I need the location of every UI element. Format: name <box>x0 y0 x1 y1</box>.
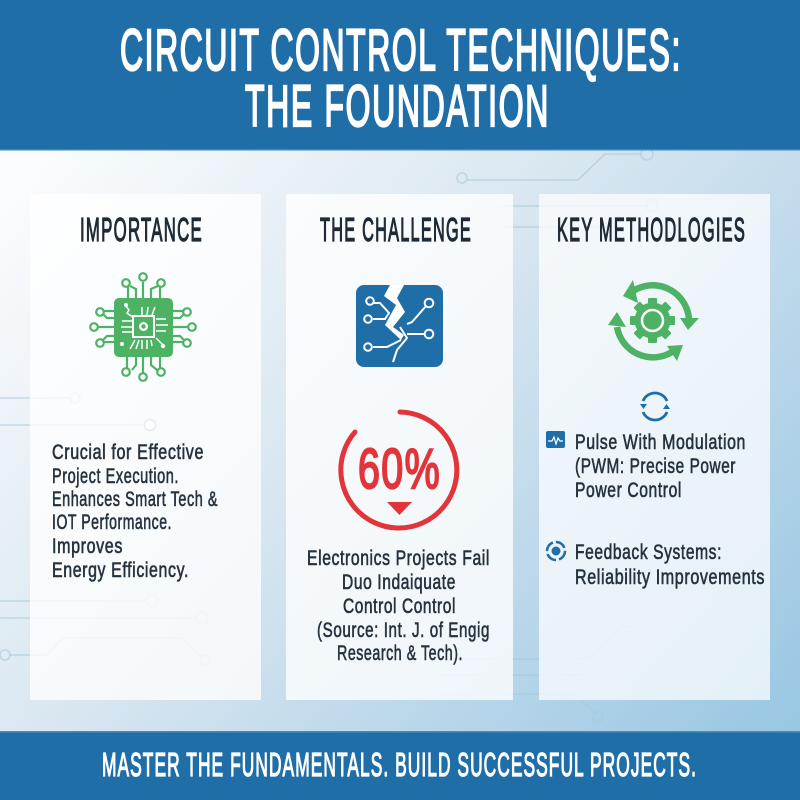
connector node on panel <box>144 420 156 430</box>
text: pwm: Power Control <box>575 479 682 502</box>
panel: the challenge: THE CHALLENGE <box>320 211 472 248</box>
text: importance points: Project Execution. <box>52 465 179 488</box>
text: challenge description: Duo Indaiquate <box>342 571 456 594</box>
text: importance points: Energy Efficiency. <box>52 559 189 582</box>
text: challenge description: Electronics Projects Fail <box>307 547 490 570</box>
header band <box>0 0 800 150</box>
text: pwm <box>575 431 746 502</box>
icon: feedback eye <box>547 542 565 560</box>
icon: green gear with cycle arrows <box>608 280 699 361</box>
chart: 60% ring gauge: 60% <box>358 437 441 501</box>
item: pulse width modulation <box>546 431 746 502</box>
icon: broken circuit <box>356 285 443 367</box>
heading: importance: IMPORTANCE <box>80 211 203 248</box>
item: feedback systems <box>547 541 765 589</box>
panel: importance <box>30 194 261 700</box>
text: pwm: (PWM: Precise Power <box>575 455 736 478</box>
text: importance points: Enhances Smart Tech & <box>52 488 218 511</box>
text: importance points <box>52 441 218 582</box>
title: THE FOUNDATION <box>245 74 550 139</box>
text: feedback <box>575 541 765 589</box>
text: feedback: Feedback Systems: <box>575 541 722 564</box>
footer band <box>0 731 800 800</box>
icon: pulse wave <box>546 431 565 448</box>
text: challenge description: (Source: Int. J. of Engig <box>317 619 490 642</box>
text: challenge description <box>307 547 490 665</box>
text: importance points: IOT Performance. <box>52 511 172 534</box>
title <box>120 18 682 139</box>
text: challenge description: Control Control <box>343 595 456 618</box>
text: importance points: Crucial for Effective <box>52 441 204 464</box>
text: pwm: Pulse With Modulation <box>575 431 746 454</box>
panel: key methodologies <box>539 194 770 700</box>
icon: green circuit chip <box>90 273 196 381</box>
background with circuit traces <box>0 148 800 732</box>
panel: the challenge <box>286 194 513 700</box>
chart: 60% ring gauge <box>341 412 457 528</box>
text: importance points: Improves <box>52 535 123 558</box>
icon: small blue cycle <box>640 393 670 420</box>
text: challenge description: Research & Tech). <box>337 642 463 665</box>
